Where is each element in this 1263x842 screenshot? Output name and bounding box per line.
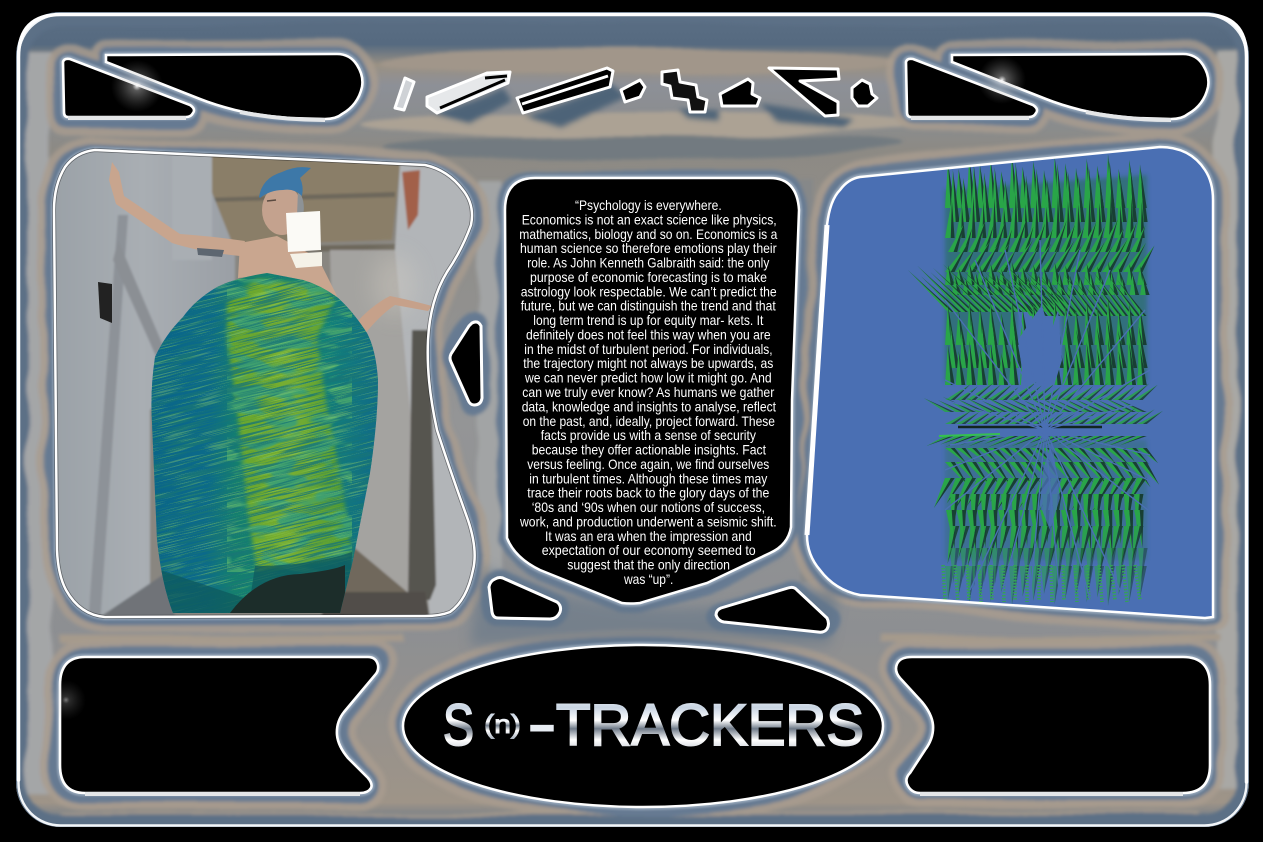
- white block: [286, 211, 321, 252]
- hair: [259, 167, 311, 198]
- blue background: [800, 140, 1220, 630]
- title: S: [443, 693, 474, 758]
- body text: in the midst of turbulent period. For individuals,: [524, 341, 773, 357]
- haze: [374, 257, 412, 313]
- body text: human science so therefore emotions play their: [520, 240, 777, 256]
- body text: future, but we can distinguish the trend and that: [521, 298, 776, 314]
- glyph 2: [427, 72, 510, 113]
- body text: astrology look respectable. We can’t predict the: [521, 283, 777, 299]
- body text: It was an era when the impression and: [545, 528, 752, 544]
- room: [50, 145, 480, 625]
- torso: [238, 236, 338, 298]
- small cutout right: [716, 587, 828, 632]
- lower lip: [911, 112, 1171, 120]
- title badge: [403, 645, 883, 807]
- glyph 1: [395, 78, 414, 110]
- panel: top left cutout: [63, 54, 362, 120]
- skirt: [151, 273, 378, 613]
- body text: role. As John Kenneth Galbraith said: the only: [527, 254, 769, 270]
- flare: [978, 56, 1026, 104]
- flare: [111, 60, 163, 112]
- glyph 6: [720, 79, 760, 106]
- panel: bottom left cutout: [46, 657, 378, 794]
- body text: we can never predict how low it might go. And: [524, 370, 772, 386]
- body text: definitely does not feel this way when you are: [526, 326, 771, 342]
- centre gap: [1018, 306, 1062, 385]
- panel: photograph: [56, 152, 474, 616]
- body text: because they offer actionable insights. Fact: [532, 442, 766, 458]
- radial blue gaps: [945, 240, 1150, 600]
- title: -: [528, 692, 556, 757]
- arrow cutout: [450, 322, 482, 405]
- body text: [519, 197, 777, 587]
- door latch: [98, 282, 112, 323]
- body text: can we truly ever know? As humans we gather: [522, 384, 775, 400]
- body text: facts provide us with a sense of security: [541, 427, 756, 443]
- dark horizontal line: [958, 426, 1102, 428]
- lower lip: [85, 792, 360, 796]
- blue panel rim: [807, 147, 1213, 618]
- panel: bottom right cutout: [896, 657, 1210, 794]
- body text: work, and production underwent a seismic shift.: [519, 514, 777, 530]
- body text: trace their roots back to the glory days of the: [527, 485, 769, 501]
- glyph 5: [662, 70, 707, 112]
- body text: on the past, and, ideally, project forward. These: [523, 413, 775, 429]
- body text: the trajectory might not always be upwards, as: [523, 355, 773, 371]
- glyph 8: [852, 80, 877, 106]
- body text: “Psychology is everywhere.: [575, 197, 722, 213]
- glyph 4: [621, 80, 645, 102]
- panel: blue spikes artwork: [800, 140, 1220, 630]
- title: (n): [484, 709, 521, 739]
- lower lip: [920, 792, 1183, 796]
- lower lip: [68, 112, 325, 120]
- body text: long term trend is up for equity mar- kets. It: [533, 312, 763, 328]
- panel: text block: [505, 178, 799, 604]
- right arm: [358, 296, 432, 332]
- panel: top right cutout: [906, 54, 1208, 120]
- glyph 3: [517, 68, 613, 113]
- spike field: [899, 154, 1175, 606]
- body text: data, knowledge and insights to analyse, reflect: [522, 398, 776, 414]
- top glyph row: [395, 68, 877, 116]
- tattoo: [197, 248, 224, 257]
- small cutout left: [489, 578, 561, 619]
- body text: versus feeling. Once again, we find ourselves: [527, 456, 769, 472]
- body text: mathematics, biology and so on. Economics is a: [519, 226, 777, 242]
- body text: Economics is not an exact science like physics,: [522, 211, 777, 227]
- head: [262, 185, 304, 235]
- shadow under top glyphs: [435, 86, 850, 130]
- hatch fringe: [943, 565, 1140, 602]
- body text: suggest that the only direction: [567, 557, 730, 573]
- photo rim: [54, 150, 475, 617]
- body text: expectation of our economy seemed to: [542, 542, 756, 558]
- glow: [46, 680, 86, 720]
- white block lower: [290, 252, 322, 268]
- body text: purpose of economic forecasting is to make: [530, 269, 767, 285]
- body text: in turbulent times. Although these times may: [529, 470, 767, 486]
- left arm: [109, 162, 245, 256]
- body text: was “up”.: [623, 571, 673, 587]
- central chrome ledge: [470, 565, 840, 645]
- title: TRACKERS: [556, 693, 864, 758]
- body text: ‘80s and ‘90s when our notions of success,: [532, 499, 765, 515]
- glyph 7: [769, 68, 839, 116]
